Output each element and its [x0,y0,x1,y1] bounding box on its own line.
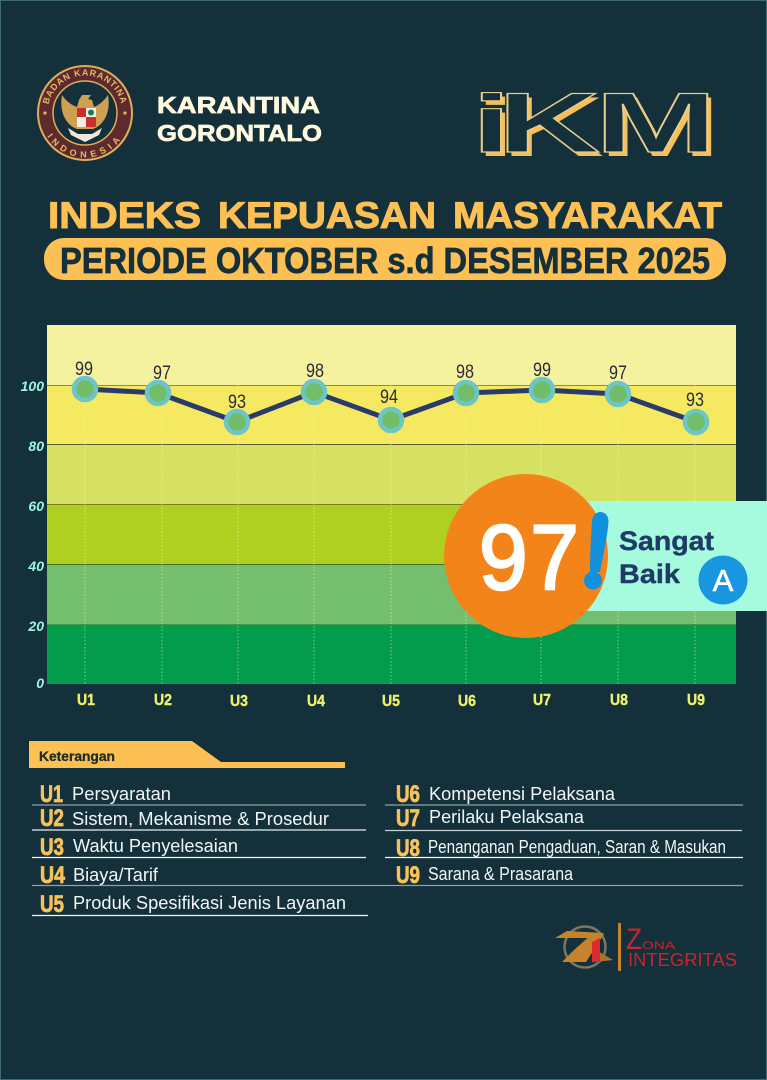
data values: 97 [609,362,627,384]
legend U3 [40,834,238,861]
data values: 99 [75,358,93,380]
line chart [21,325,736,710]
x axis labels: U6 [458,693,476,710]
chart bands [47,325,736,684]
legend U5 [40,891,346,918]
wordmark: ONA [642,940,676,952]
legend heading [29,741,345,768]
IKM wordmark [472,76,721,175]
x axis labels: U7 [533,692,551,709]
logo: Badan Karantina Indonesia: INDONESIA [47,133,120,158]
icon: ZI emblem [555,926,613,968]
wordmark [626,923,737,970]
title: INDEKS [48,195,201,236]
wordmark: INTEGRITAS [628,950,737,970]
legend U4: U4 [40,862,66,889]
legend U5: Produk Spesifikasi Jenis Layanan [73,893,346,913]
IKM wordmark: M [599,80,721,175]
x axis labels: U8 [610,692,628,709]
y axis labels: 60 [28,498,44,514]
grade badge: A [713,563,734,598]
data values: 93 [228,391,246,413]
title: KEPUASAN [218,195,436,236]
IKM wordmark: K [502,80,604,175]
y axis labels: 80 [28,438,44,454]
logo: Badan Karantina Indonesia: BADAN KARANTINA [42,69,126,104]
x axis labels: U3 [230,693,248,710]
legend U3: Waktu Penyelesaian [73,836,238,856]
legend U1: U1 [40,781,63,808]
x axis labels: U5 [382,693,400,710]
y axis labels [21,378,44,691]
IKM wordmark: i [476,83,515,174]
x axis labels [77,692,705,710]
legend U2 [40,805,329,832]
IKM wordmark: M [595,76,717,171]
legend U7: Perilaku Pelaksana [429,807,585,827]
legend left column [32,781,743,918]
legend U1: Persyaratan [72,784,171,804]
rating label: Sangat [619,526,714,556]
data values [75,358,704,413]
score number: 97 [479,507,579,610]
legend U8: U8 [396,835,420,862]
Zona Integritas logo [555,923,737,971]
legend U5: U5 [40,891,64,918]
y axis labels: 20 [27,618,44,634]
data values: 97 [153,362,171,384]
organisation name: KARANTINA [157,92,320,118]
legend U6 [396,781,616,808]
rating label [619,526,714,589]
period pill: PERIODE OKTOBER s.d DESEMBER 2025 [60,240,710,281]
legend U7: U7 [396,805,420,832]
legend U6: Kompetensi Pelaksana [429,784,616,804]
grade badge [698,556,748,604]
x axis labels: U9 [687,692,705,709]
legend U4: Biaya/Tarif [73,865,159,885]
x axis labels: U1 [77,692,95,709]
y axis labels: 40 [27,558,44,574]
IKM wordmark: i [472,79,511,170]
legend U8 [396,835,726,862]
data line [85,389,696,422]
wordmark: Z [626,923,642,956]
legend U9 [396,862,574,889]
organisation name: GORONTALO [157,120,322,146]
data values: 99 [533,359,551,381]
legend heading: Keterangan [39,748,115,764]
data values: 98 [456,361,474,383]
y axis labels: 100 [21,378,44,394]
score callout [444,474,767,638]
legend right column [385,781,743,889]
organisation name [157,92,322,146]
legend U7 [396,805,585,832]
legend U4 [40,862,159,889]
exclamation mark [584,512,608,590]
data values: 98 [306,360,324,382]
legend U9: Sarana & Prasarana [428,864,574,884]
data markers [74,378,707,433]
legend U1 [40,781,171,808]
legend U3: U3 [40,834,64,861]
legend U9: U9 [396,862,420,889]
IKM wordmark: K [498,76,600,171]
title [48,195,722,236]
title: MASYARAKAT [453,195,722,236]
legend U2: U2 [40,805,64,832]
data values: 93 [686,389,704,411]
y axis labels: 0 [36,675,44,691]
legend U6: U6 [396,781,420,808]
legend U2: Sistem, Mekanisme & Prosedur [72,809,329,829]
rating label: Baik [619,559,681,589]
logo: Badan Karantina Indonesia [37,65,133,161]
data values: 94 [380,386,398,408]
x axis labels: U4 [307,693,325,710]
x axis labels: U2 [154,692,172,709]
